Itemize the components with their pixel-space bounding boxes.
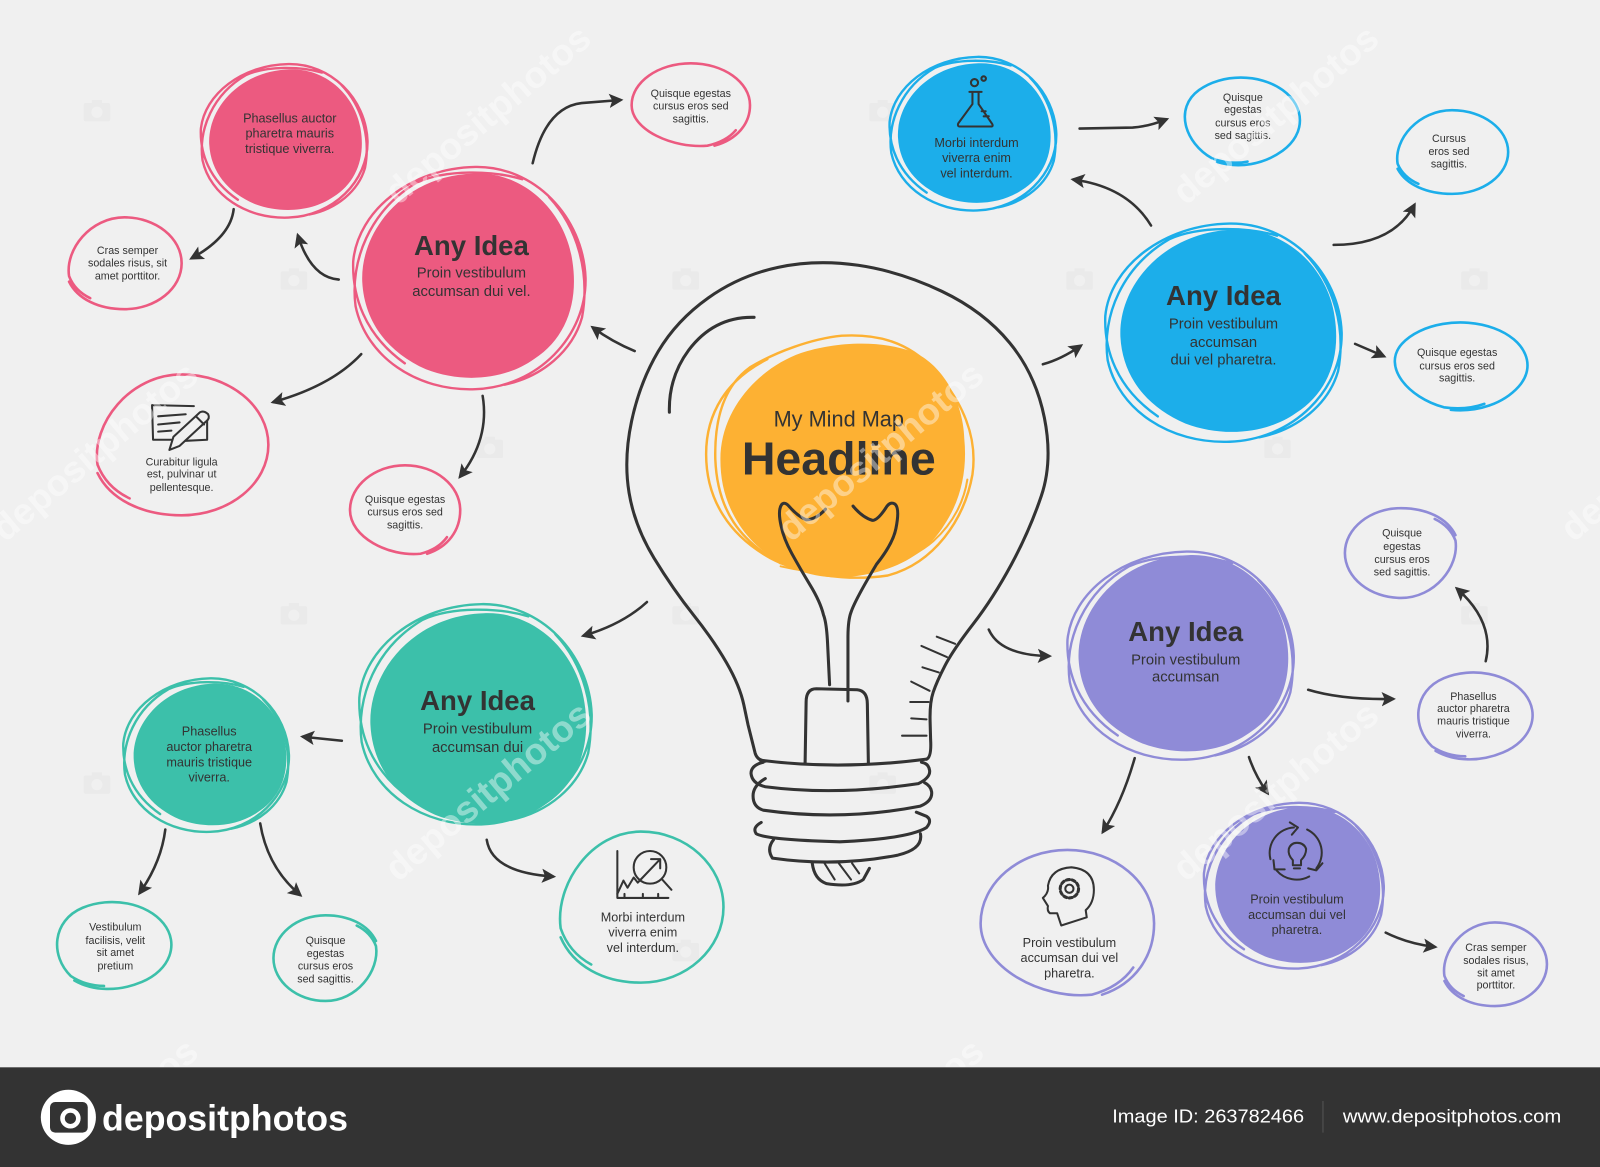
brand name: depositphotos [102,1099,348,1139]
watermark camera marks [84,100,1488,961]
blue main idea: accumsan [1190,335,1257,351]
purple note: cras: porttitor. [1477,980,1515,992]
green note: vestibulum: facilisis, velit [86,935,145,947]
watermark: depositphotos [1165,693,1386,889]
pink note: cras: sodales risus, sit [88,257,167,269]
purple note: proin with head icon: accumsan dui vel [1021,951,1118,965]
watermark: depositphotos [377,17,599,212]
purple note: cras: sit amet [1477,967,1515,979]
watermark: depositphotos [1165,17,1386,212]
green filled note: Phasellus [182,725,237,739]
green filled note [123,678,289,832]
central idea: orange blob and headline [706,335,974,578]
green note: morbi with chart icon: viverra enim [608,926,677,940]
light bulb drawing [627,263,1048,885]
green note: morbi with chart icon: vel interdum. [607,941,679,955]
central idea: orange blob and headline: Headline [742,432,936,484]
image id: Image ID: 263782466 [1112,1105,1304,1126]
pink note: cras [69,217,182,309]
blue note: quisque: Quisque [1223,92,1263,104]
green note: quisque: cursus eros [298,960,353,972]
pink note: quisque top: Quisque egestas [651,88,731,100]
green main idea: accumsan dui [432,740,523,756]
purple note: cras [1444,922,1547,1006]
pink main idea: Any Idea [414,230,530,261]
watermark: depositphotos [377,693,599,889]
blue note: quisque: cursus eros [1215,118,1271,130]
icon: cycle with bulb [1270,822,1322,880]
purple filled note with idea cycle icon: pharetra. [1272,923,1322,937]
purple note: proin with head icon: Proin vestibulum [1023,936,1116,950]
panel: blue branch [890,57,1552,442]
blue note: quisque lower: cursus eros sed [1419,360,1495,372]
blue note: quisque [1158,60,1325,180]
green main idea: Proin vestibulum [423,722,532,738]
green note: quisque: sed sagittis. [297,974,354,986]
purple note: cras: Cras semper [1465,942,1527,954]
pink note: quisque top: cursus eros sed [653,101,729,113]
purple note: proin with head icon [981,850,1154,995]
purple note: quisque: Quisque [1382,528,1422,540]
blue note: cursus: eros sed [1428,146,1470,158]
pink note: cras: Cras semper [97,245,159,257]
purple filled note with idea cycle icon [1204,803,1384,969]
pink note: quisque bottom: cursus eros sed [367,506,443,518]
green filled note: mauris tristique [166,755,252,769]
purple note: quisque: egestas [1383,541,1421,553]
panel: purple branch [981,508,1554,1006]
pink filled note: tristique viverra. [245,142,334,156]
blue note: cursus: sagittis. [1431,158,1467,170]
icon: flask [958,76,993,127]
purple filled note with idea cycle icon: Proin vestibulum [1250,893,1344,907]
blue filled note with flask: Morbi interdum [934,136,1019,150]
purple note: quisque [1345,508,1456,598]
blue main idea: dui vel pharetra. [1170,352,1276,368]
purple note: quisque: sed sagittis. [1374,566,1430,578]
pink main idea: Proin vestibulum [417,266,526,282]
pink filled note: pharetra mauris [246,127,334,141]
watermark: depositphotos [770,354,991,549]
blue note: quisque lower [1369,307,1552,423]
purple note: phasellus: Phasellus [1450,691,1497,703]
panel: pink branch [69,63,750,554]
blue note: cursus: Cursus [1432,133,1466,145]
blue note: quisque: sed sagittis. [1215,130,1271,142]
purple note: quisque: cursus eros [1374,554,1430,566]
blue filled note with flask: viverra enim [942,151,1011,165]
pink filled note [201,64,368,218]
purple note: phasellus: mauris tristique [1437,715,1510,727]
pink note: curabitur with pencil icon: pellentesque. [150,482,213,494]
purple main idea: accumsan [1152,670,1219,686]
purple main idea [1067,552,1294,760]
green note: morbi with chart icon [560,832,723,983]
purple main idea: Proin vestibulum [1131,652,1240,668]
purple filled note with idea cycle icon: accumsan dui vel [1248,908,1346,922]
blue note: cursus [1397,110,1508,194]
green filled note: auctor pharetra [166,740,253,754]
arrows between nodes [140,100,1488,947]
green main idea [359,604,592,824]
pink note: quisque top [632,63,750,146]
blue filled note with flask [890,57,1056,211]
blue main idea: Any Idea [1166,280,1282,311]
green filled note: viverra. [188,771,230,785]
green note: morbi with chart icon: Morbi interdum [601,910,685,924]
blue main idea: Proin vestibulum [1169,317,1278,333]
pink note: curabitur with pencil icon: Curabitur ligula [146,456,218,468]
pink main idea: accumsan dui vel. [412,284,531,300]
blue note: quisque: egestas [1224,104,1262,116]
green note: quisque: Quisque [306,935,345,947]
pink note: quisque bottom: sagittis. [387,520,423,532]
green note: vestibulum: sit amet [97,947,134,959]
green note: quisque: egestas [307,948,344,960]
blue filled note with flask: vel interdum. [940,167,1013,181]
pink note: curabitur with pencil icon: est, pulvinar ut [147,469,216,481]
green note: quisque [273,915,376,1001]
green note: vestibulum: pretium [97,960,133,972]
pink filled note: Phasellus auctor [243,111,337,125]
purple main idea: Any Idea [1128,616,1244,647]
central idea: orange blob and headline: My Mind Map [774,407,904,432]
icon: camera logo [41,1090,96,1145]
purple note: phasellus [1394,657,1554,773]
purple note: cras: sodales risus, [1463,955,1529,967]
pink note: cras: amet porttitor. [95,271,160,283]
pink note: quisque bottom [350,465,460,554]
pink main idea [353,167,586,389]
website: www.depositphotos.com [1342,1105,1561,1126]
green note: vestibulum [33,886,193,1003]
purple note: proin with head icon: pharetra. [1044,967,1095,981]
blue note: quisque lower: Quisque egestas [1417,347,1497,359]
purple note: phasellus: auctor pharetra [1437,703,1510,715]
footer bar [0,1067,1600,1167]
pink note: quisque bottom: Quisque egestas [365,494,445,506]
panel: green branch [33,604,723,1003]
green note: vestibulum: Vestibulum [89,922,142,934]
icon: chart and magnifier [617,851,671,898]
icon: head with gear [1043,867,1094,925]
pink note: curabitur with pencil icon [97,374,268,515]
blue main idea [1105,224,1342,442]
green main idea: Any Idea [420,685,536,716]
icon: note and pencil [152,405,209,450]
purple note: phasellus: viverra. [1456,729,1491,741]
blue note: quisque lower: sagittis. [1439,373,1475,385]
pink note: quisque top: sagittis. [673,113,709,125]
